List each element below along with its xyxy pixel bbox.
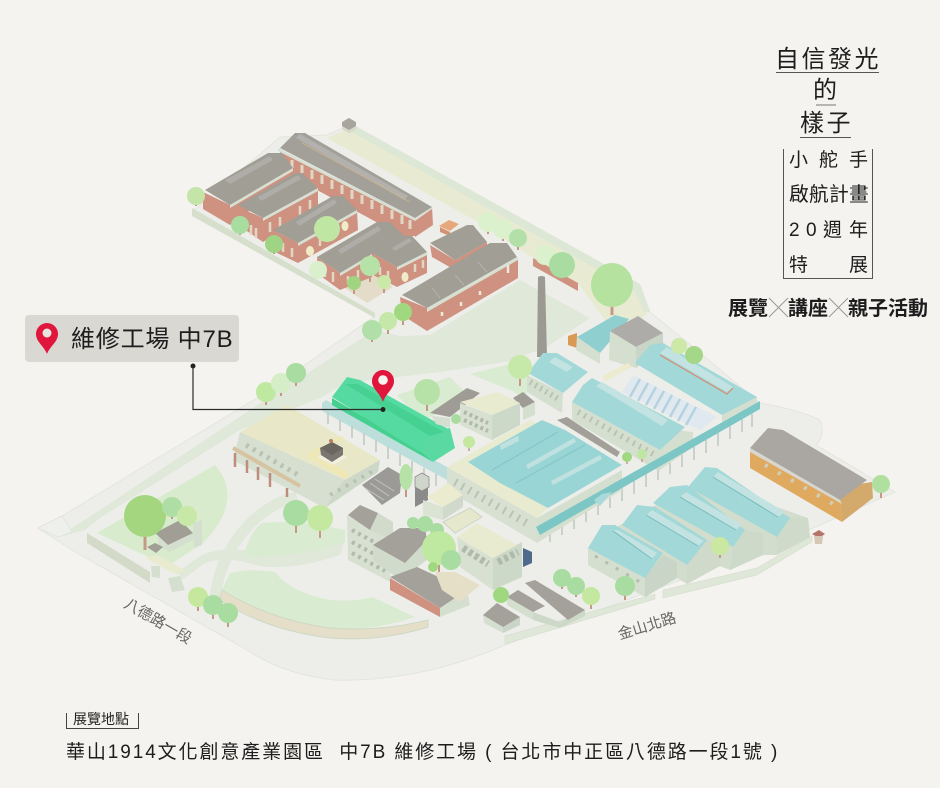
large garden tree bbox=[124, 495, 166, 550]
tree bbox=[508, 355, 532, 386]
driveway branch bbox=[178, 540, 345, 580]
wall: south-east road wall bbox=[505, 594, 655, 644]
tagline: 講座 bbox=[788, 296, 828, 320]
tree bbox=[478, 212, 498, 234]
road: entrance block bbox=[38, 516, 72, 537]
subtitle box: 手 bbox=[849, 149, 868, 171]
guard hut bbox=[812, 530, 825, 544]
columns under canopy bbox=[550, 414, 752, 542]
brick hall: west 1 bbox=[203, 153, 293, 225]
hall 4 bbox=[688, 467, 810, 555]
small gray annex bbox=[513, 392, 535, 420]
tree bbox=[256, 382, 276, 405]
orange warehouse bbox=[750, 428, 873, 522]
tagline: 展覽 bbox=[728, 297, 768, 320]
tree bbox=[187, 187, 205, 206]
tree bbox=[549, 252, 575, 281]
central buildings bbox=[347, 388, 585, 633]
tree bbox=[231, 216, 249, 235]
tree bbox=[872, 475, 890, 498]
courtyard bbox=[343, 275, 393, 303]
subtitle box: 航 bbox=[809, 184, 829, 206]
leader line bbox=[190, 364, 386, 412]
greenhouse glass bbox=[622, 375, 717, 430]
orange hut bbox=[439, 220, 459, 236]
tagline bbox=[728, 296, 928, 320]
tree bbox=[622, 452, 632, 464]
tree bbox=[582, 587, 600, 609]
brick hall: small east bbox=[430, 225, 487, 270]
subtitle box: 畫 bbox=[849, 184, 869, 206]
lawn: south-west garden bbox=[97, 465, 228, 566]
rooftop pavilion bbox=[317, 439, 347, 465]
twin gray house south bbox=[507, 580, 585, 628]
tree bbox=[283, 500, 309, 533]
brick hall: west 3 bbox=[273, 196, 358, 263]
left yellow hall bbox=[233, 405, 380, 508]
lawn: small west of teal bbox=[505, 372, 528, 400]
low gray wing bbox=[430, 388, 480, 428]
garden villa bbox=[87, 520, 202, 592]
cream tall building bbox=[460, 392, 520, 440]
subtitle box bbox=[784, 149, 872, 278]
brick hall: short bbox=[372, 236, 427, 287]
tree cluster bbox=[407, 516, 444, 537]
driveway curve bbox=[215, 497, 297, 597]
north boundary wall bbox=[350, 124, 650, 312]
subtitle box: 啟 bbox=[789, 184, 809, 206]
tree bbox=[567, 577, 585, 597]
highlighted corridor bbox=[322, 400, 447, 486]
tree bbox=[394, 303, 412, 325]
central teal hall bbox=[447, 420, 622, 543]
tree bbox=[671, 338, 687, 354]
tree bbox=[307, 505, 333, 538]
brick low house bbox=[390, 567, 470, 617]
tree bbox=[203, 595, 223, 619]
trees bbox=[124, 187, 890, 627]
tree bbox=[637, 449, 647, 462]
row house west bbox=[347, 505, 393, 582]
teal hall: centre bbox=[572, 378, 693, 472]
tree bbox=[379, 312, 397, 334]
gray gable house bbox=[373, 528, 427, 580]
chimney bbox=[537, 276, 547, 357]
lawn: small east patch bbox=[470, 364, 535, 394]
water tower bbox=[415, 473, 429, 507]
tree bbox=[441, 550, 461, 570]
tree bbox=[314, 216, 340, 245]
tree bbox=[535, 245, 555, 265]
tree bbox=[162, 497, 182, 519]
cream block with stairs bbox=[457, 523, 532, 590]
tree bbox=[286, 363, 306, 386]
title: 自信發光 bbox=[775, 46, 881, 73]
hall 2 bbox=[622, 505, 720, 584]
subtitle box: 展 bbox=[849, 255, 868, 276]
subtitle box: 特 bbox=[789, 254, 808, 276]
tree bbox=[615, 576, 635, 600]
teal hall: west block bbox=[527, 353, 588, 413]
tan terrace bbox=[435, 572, 480, 602]
tree bbox=[509, 229, 527, 250]
hall 1 bbox=[588, 525, 677, 597]
lawn: centre patches bbox=[397, 377, 468, 422]
small cream house bbox=[423, 483, 463, 520]
brick wall east bbox=[533, 258, 578, 291]
north brick warehouse group bbox=[203, 118, 578, 331]
gray back roof bbox=[557, 417, 620, 457]
lawn: large strip and field bbox=[58, 280, 590, 537]
brick hall: middle pair bbox=[317, 222, 405, 290]
title bbox=[775, 46, 881, 138]
target building: 維修工場 中7B bbox=[332, 377, 455, 462]
lawn: inner wedge bbox=[243, 522, 345, 557]
tree bbox=[463, 436, 475, 451]
gray roof block bbox=[609, 316, 663, 368]
tree bbox=[451, 414, 461, 424]
teal hall: north-east bbox=[635, 343, 757, 427]
teal complex: north group bbox=[447, 315, 760, 543]
road label: 金山北路: 金山北路 bbox=[616, 610, 678, 643]
subtitle box: 小 bbox=[789, 149, 808, 171]
tree bbox=[218, 603, 238, 627]
teal complex: south-east halls bbox=[588, 467, 825, 597]
tree bbox=[309, 261, 327, 279]
road label: 八德路一段: 八德路一段 bbox=[121, 594, 195, 648]
tree bbox=[711, 537, 729, 558]
brick hall: west 2 bbox=[238, 173, 318, 242]
subtitle box: 舵 bbox=[819, 149, 838, 171]
tree bbox=[493, 219, 513, 241]
gatehouse bbox=[342, 118, 356, 133]
location pin on map bbox=[372, 370, 394, 402]
wall: south-east road wall 2 bbox=[663, 536, 812, 598]
brick hall: long low bbox=[400, 243, 518, 331]
tree bbox=[414, 379, 440, 411]
tree bbox=[685, 346, 703, 364]
tree bbox=[177, 506, 197, 526]
stepped seating bbox=[362, 467, 402, 505]
big tree bbox=[422, 531, 456, 572]
hall 3 bbox=[653, 485, 763, 570]
title: 樣子 bbox=[800, 110, 853, 137]
wall silhouette bbox=[588, 480, 810, 597]
poplar tree bbox=[400, 464, 412, 497]
subtitle box: 2 bbox=[789, 220, 800, 241]
yellow north band bbox=[327, 128, 648, 335]
tree bbox=[271, 373, 291, 396]
footer: location heading: 展覽地點 bbox=[73, 711, 129, 727]
tree bbox=[362, 320, 382, 342]
subtitle box: 計 bbox=[829, 184, 849, 206]
tree bbox=[493, 587, 509, 603]
link bridge bbox=[602, 363, 632, 381]
subtitle box: 年 bbox=[849, 219, 868, 241]
small gray house south bbox=[483, 603, 520, 633]
gray roof strip building bbox=[443, 508, 482, 533]
north-west boundary wall bbox=[192, 208, 375, 318]
subtitle box: 週 bbox=[823, 219, 842, 241]
title: 的 bbox=[813, 77, 837, 104]
footer: address: 華山1914文化創意產業園區 中7B 維修工場 ( 台北市中正區八德路一段1號 ) bbox=[66, 741, 779, 763]
location label bbox=[25, 315, 239, 362]
balcony bbox=[233, 448, 300, 486]
tree bbox=[265, 235, 283, 254]
brick hall: long rear bbox=[278, 133, 433, 237]
lawn: south crescent bbox=[222, 570, 415, 629]
label text: 維修工場 中7B bbox=[71, 326, 233, 353]
path: tan band bbox=[220, 590, 428, 639]
tagline: 親子活動 bbox=[848, 297, 928, 320]
small teal house with orange annex bbox=[568, 315, 629, 364]
tree bbox=[377, 275, 391, 293]
tree bbox=[347, 276, 361, 294]
tree bbox=[188, 587, 208, 611]
icon: label pin bbox=[36, 323, 58, 354]
large tree bbox=[591, 263, 633, 315]
tree bbox=[553, 569, 571, 589]
teal canopy walkway bbox=[536, 401, 760, 535]
map: site ground bbox=[38, 124, 895, 680]
subtitle box: 0 bbox=[806, 220, 817, 241]
tree bbox=[360, 256, 380, 282]
